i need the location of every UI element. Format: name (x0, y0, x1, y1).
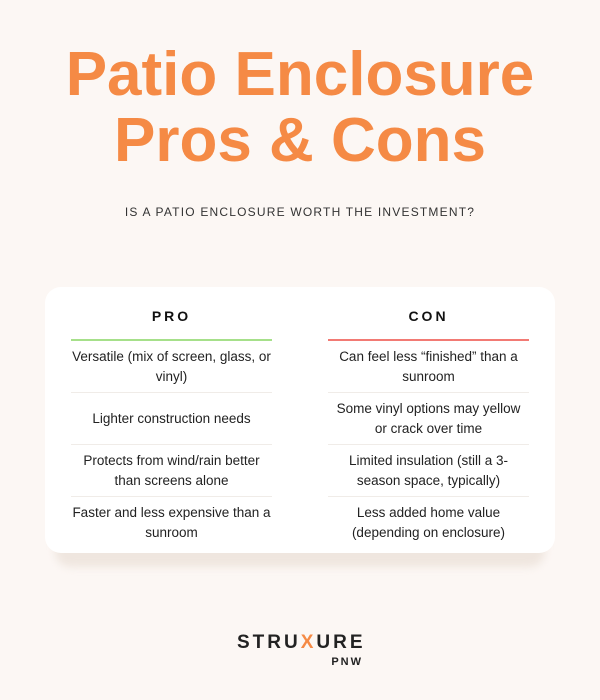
column: pro: Lighter construction needs (92, 410, 251, 426)
column: pro: Faster and less expensive than a sunroom (72, 504, 271, 540)
title: Patio Enclosure (66, 40, 534, 109)
column: con: Less added home value (depending on enclosure) (352, 504, 505, 540)
column: con: Can feel less “finished” than a sunroom (339, 348, 518, 384)
column: pro: PRO (152, 308, 191, 324)
logo: STRUXURE (237, 632, 366, 653)
column: con: Limited insulation (still a 3-season space, typically) (349, 452, 508, 488)
column: pro: Protects from wind/rain better than screens alone (83, 452, 260, 488)
logo: PNW (331, 656, 363, 668)
title (66, 40, 534, 175)
subtitle: IS A PATIO ENCLOSURE WORTH THE INVESTMENT? (125, 205, 475, 219)
column: con (328, 308, 529, 540)
logo (237, 632, 366, 668)
title: Pros & Cons (114, 106, 486, 175)
column: con: CON (408, 308, 449, 324)
panel: pros and cons table (45, 287, 555, 553)
column: pro (71, 308, 272, 540)
column: con: Some vinyl options may yellow or crack over time (337, 400, 520, 436)
column: pro: Versatile (mix of screen, glass, or vinyl) (72, 348, 271, 384)
